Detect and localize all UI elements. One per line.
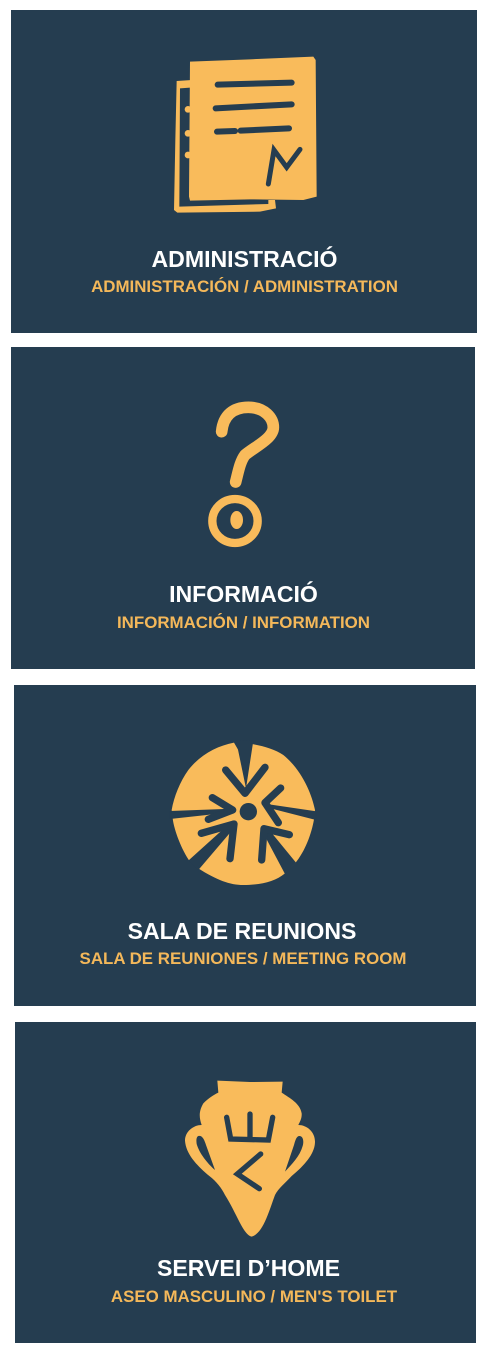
subtitle: INFORMACIÓN / INFORMATION — [117, 613, 370, 632]
panel: sala de reunions — [14, 685, 476, 1006]
title: ADMINISTRACIÓ — [151, 245, 338, 272]
icon: converging arrows — [170, 740, 317, 885]
title: SALA DE REUNIONS — [128, 918, 356, 944]
icon: question mark — [212, 407, 273, 543]
panel: servei d'home — [15, 1022, 476, 1343]
title: SERVEI D’HOME — [157, 1255, 340, 1281]
panel: administració — [11, 10, 477, 333]
panel: informació — [11, 347, 475, 669]
icon: documents — [174, 57, 317, 213]
title: INFORMACIÓ — [169, 580, 318, 607]
subtitle: SALA DE REUNIONES / MEETING ROOM — [80, 949, 406, 968]
subtitle: ASEO MASCULINO / MEN'S TOILET — [111, 1287, 398, 1306]
subtitle: ADMINISTRACIÓN / ADMINISTRATION — [91, 277, 398, 296]
icon: amphora — [185, 1081, 315, 1237]
